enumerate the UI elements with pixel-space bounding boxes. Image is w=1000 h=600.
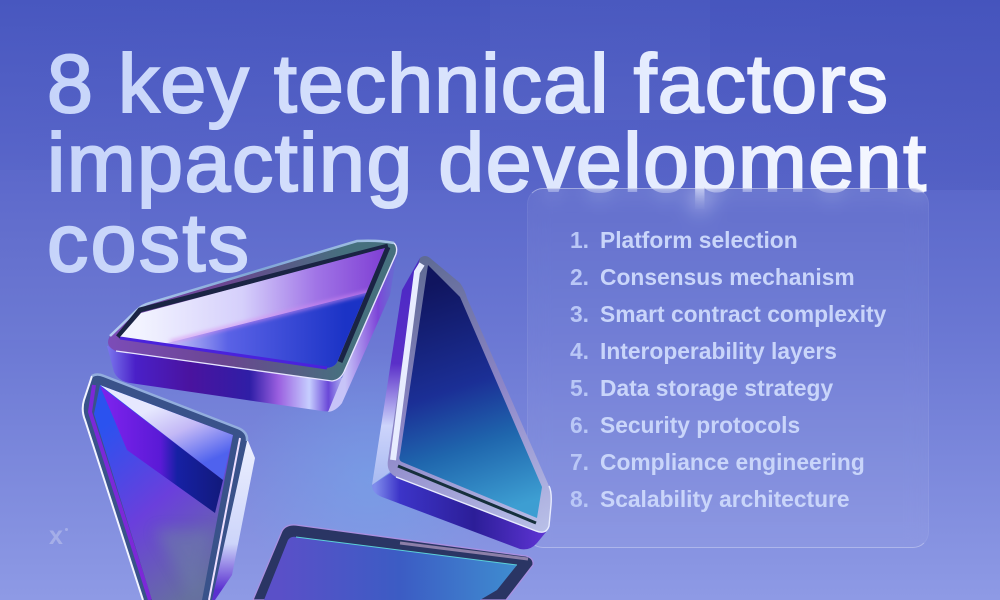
3D star graphic xyxy=(82,240,552,600)
list item 1: 1. xyxy=(570,227,589,253)
list item 4: 4. xyxy=(570,338,589,364)
list item 3: Smart contract complexity xyxy=(600,301,886,327)
title: impacting development xyxy=(47,117,926,209)
right blade rim xyxy=(388,256,551,532)
list item 2: 2. xyxy=(570,264,589,290)
title: costs xyxy=(47,197,249,289)
right blade bottom wall xyxy=(372,472,546,549)
panel: factor list xyxy=(527,188,929,548)
logo mark: x xyxy=(49,522,63,550)
shape: right blade xyxy=(372,256,551,549)
list item 1: Platform selection xyxy=(600,227,798,253)
list item 7: 7. xyxy=(570,449,589,475)
list item 8: 8. xyxy=(570,486,589,512)
title: 8 key technical factors xyxy=(47,38,888,130)
list item 5: 5. xyxy=(570,375,589,401)
top blade rim xyxy=(108,241,397,381)
top blade face xyxy=(120,248,385,368)
top blade side wall xyxy=(107,346,342,411)
top blade right wall xyxy=(328,252,397,412)
shape: bottom blade xyxy=(253,525,533,600)
left blade rim xyxy=(83,374,247,600)
list item 5: Data storage strategy xyxy=(600,375,833,401)
list item 6: Security protocols xyxy=(600,412,800,438)
left blade face xyxy=(94,385,233,600)
list item 3: 3. xyxy=(570,301,589,327)
bottom blade face xyxy=(264,537,517,600)
bottom blade rim xyxy=(253,525,533,600)
list item 2: Consensus mechanism xyxy=(600,264,855,290)
right blade left wall xyxy=(372,258,420,485)
list item 4: Interoperability layers xyxy=(600,338,837,364)
right blade face xyxy=(399,265,542,518)
shape: top blade xyxy=(107,241,397,412)
left blade right wall xyxy=(205,436,255,600)
list item 7: Compliance engineering xyxy=(600,449,865,475)
list item 6: 6. xyxy=(570,412,589,438)
list item 8: Scalability architecture xyxy=(600,486,850,512)
shape: left blade xyxy=(83,374,255,600)
